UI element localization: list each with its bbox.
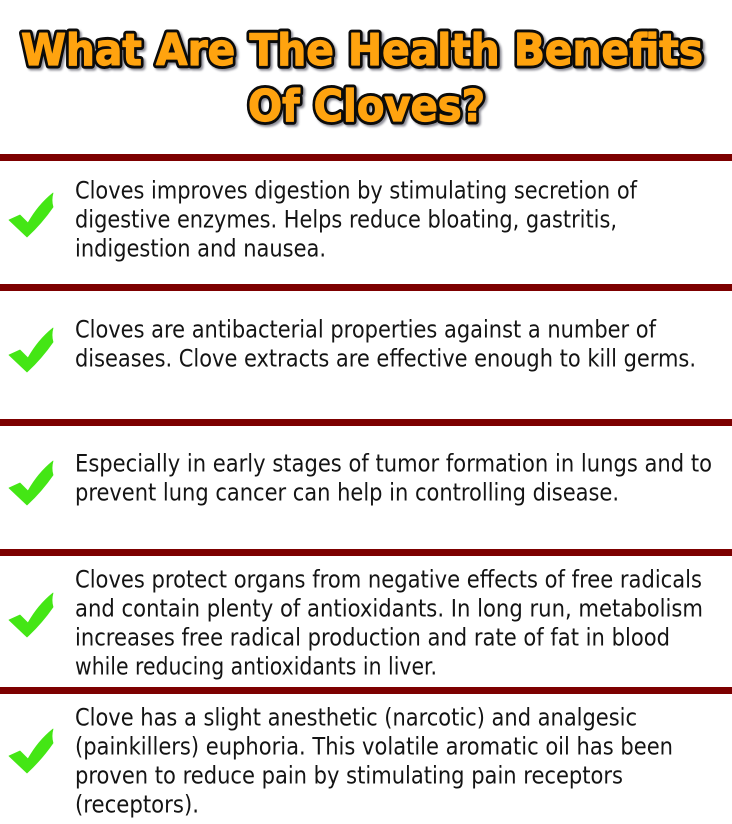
panel: digestion bbox=[9, 176, 637, 262]
divider bars bbox=[0, 154, 732, 694]
text: pain relief bbox=[75, 704, 673, 818]
icon: green check bbox=[9, 193, 53, 237]
icon: green check bbox=[9, 729, 53, 773]
text: digestion bbox=[75, 176, 637, 262]
title bbox=[21, 25, 705, 134]
text: antioxidants: while reducing antioxidants in liver. bbox=[75, 652, 437, 680]
title: Of Cloves? bbox=[248, 81, 485, 132]
text: antibacterial: Cloves are antibacterial properties against a number of bbox=[75, 316, 656, 344]
icon: green check bbox=[9, 593, 53, 637]
text: pain relief: (receptors). bbox=[75, 790, 199, 818]
text: digestion: digestive enzymes. Helps reduce bloating, gastritis, bbox=[75, 206, 617, 234]
panel: antibacterial bbox=[9, 316, 696, 372]
title: Of Cloves? bbox=[250, 83, 487, 134]
panel: lung cancer bbox=[9, 450, 712, 506]
panel: antioxidants bbox=[9, 566, 703, 680]
icon: green check bbox=[9, 461, 53, 505]
icon: green check bbox=[9, 328, 53, 372]
title: Of Cloves? bbox=[248, 81, 485, 132]
text: pain relief: Clove has a slight anesthetic (narcotic) and analgesic bbox=[75, 704, 637, 732]
text: antibacterial bbox=[75, 316, 696, 372]
text: digestion: Cloves improves digestion by stimulating secretion of bbox=[75, 176, 637, 204]
text: lung cancer: prevent lung cancer can help in controlling disease. bbox=[75, 478, 619, 506]
text: antioxidants bbox=[75, 566, 703, 680]
panel: pain relief bbox=[9, 704, 673, 818]
text: pain relief: proven to reduce pain by stimulating pain receptors bbox=[75, 762, 623, 790]
text: digestion: indigestion and nausea. bbox=[75, 234, 326, 262]
text: lung cancer bbox=[75, 450, 712, 506]
